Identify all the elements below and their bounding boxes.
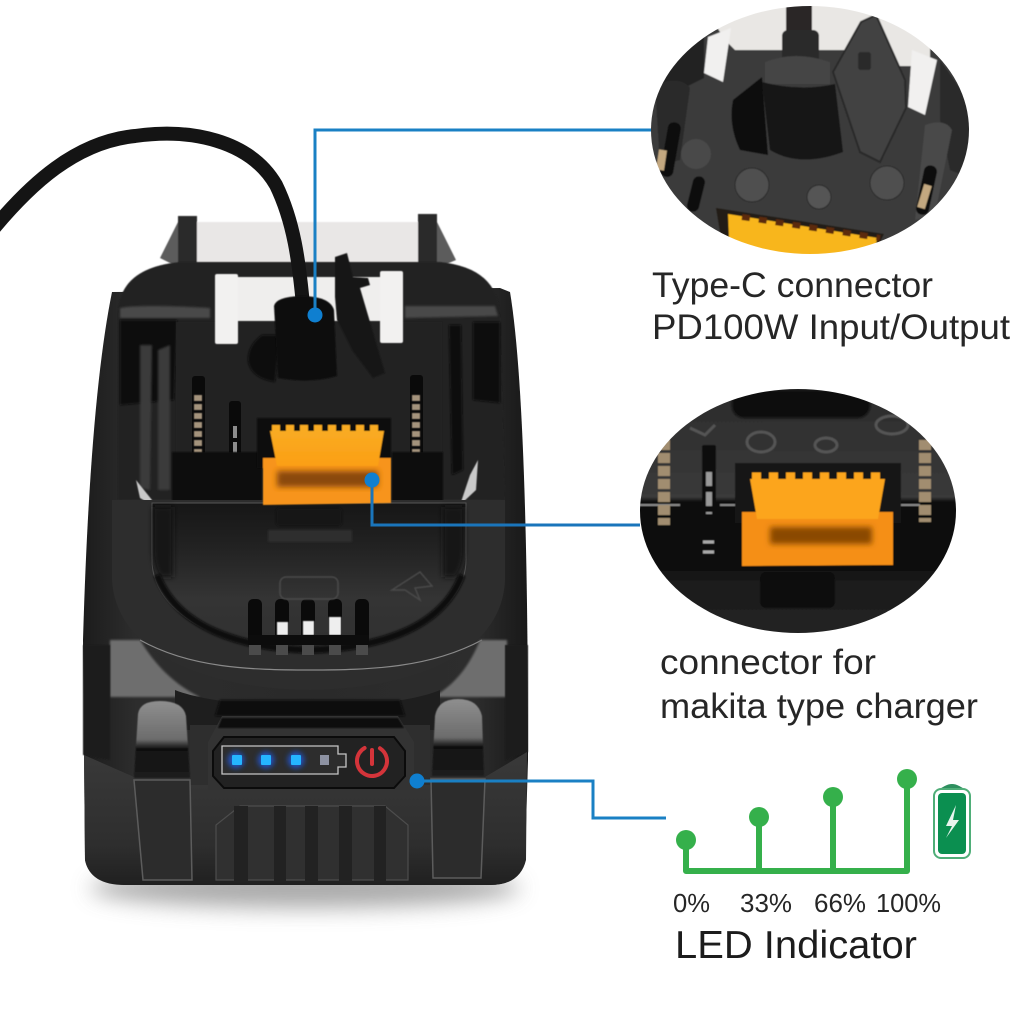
chart labels: percentages: 66% (814, 888, 866, 918)
connector lower tab (263, 458, 391, 505)
lower orange tab (742, 512, 893, 566)
vent slots (248, 599, 369, 655)
power symbol (351, 740, 393, 782)
circle background (640, 389, 956, 633)
clip bump right (432, 699, 484, 776)
orange teeth (752, 472, 885, 480)
yellow connector (716, 208, 884, 243)
white side trim (136, 460, 478, 505)
black contact base (172, 452, 443, 505)
highlight bars on shoulder (120, 306, 498, 318)
lip highlight (140, 640, 482, 670)
label: connector for makita type charger: makita type charger (660, 687, 978, 726)
plate lip (157, 575, 462, 650)
right side slot (449, 325, 463, 475)
lower plate (152, 503, 466, 650)
power cable (0, 134, 303, 305)
callout: Type-C leader line (308, 130, 654, 322)
panel face (213, 737, 405, 788)
lower recess (760, 572, 835, 608)
LED level chart (676, 769, 917, 871)
right slot housing (915, 122, 952, 220)
panel top slot (218, 718, 404, 728)
product: battery adapter photo (0, 134, 528, 908)
label: Type-C connector (652, 266, 1010, 347)
main housing (83, 288, 528, 885)
grip fins (216, 806, 408, 882)
label: LED Indicator: LED Indicator (675, 924, 917, 967)
type-C plug (274, 296, 337, 381)
battery outline (222, 746, 346, 774)
white clip right (380, 271, 403, 343)
dark side recesses (120, 320, 500, 405)
outer ring (112, 500, 505, 690)
plug cap (765, 56, 830, 84)
connector recess (257, 418, 391, 468)
chart labels: percentages: 33% (740, 888, 792, 918)
upper centre band (190, 725, 430, 785)
connector recess (735, 463, 901, 523)
plate notch (732, 77, 768, 155)
top recess (732, 390, 870, 418)
ground shadow (90, 868, 520, 908)
center dark neck (175, 690, 440, 730)
embossed logo marks (280, 572, 432, 600)
orange gap (770, 527, 872, 544)
chart labels: percentages: 0% (673, 888, 710, 918)
chart labels: percentages: 100% (876, 888, 941, 918)
panel base (208, 716, 414, 790)
clip bump left (134, 701, 190, 778)
left slot housing (655, 81, 690, 165)
upper orange block (750, 479, 885, 519)
white rear wall (718, 6, 931, 67)
label: Type-C connector: PD100W Input/Output (652, 308, 1010, 347)
connector notches (742, 217, 880, 238)
embossed buttons (681, 139, 904, 209)
white clip left (215, 274, 238, 344)
grey shoulder right (433, 640, 507, 697)
side ribs (140, 345, 170, 490)
lower block outline right (431, 779, 485, 878)
detail circle: Type-C connector (651, 6, 969, 254)
side divider strip (640, 504, 950, 506)
lower block outline left (134, 780, 192, 880)
label: connector for makita type charger: connector for (660, 643, 876, 682)
icon: green battery (934, 785, 970, 858)
white rear housing (160, 214, 456, 270)
orange connector (257, 418, 391, 505)
plug body (762, 82, 843, 160)
recess under connector (268, 508, 352, 542)
LED panel (208, 716, 414, 790)
white band (235, 277, 385, 321)
contact columns (664, 440, 925, 552)
label: connector for makita type charger (660, 643, 978, 726)
flap in detail (833, 15, 906, 162)
plug neck (781, 30, 820, 58)
type-C port shadow (248, 335, 280, 382)
right clip (908, 50, 937, 115)
label: Type-C connector: Type-C connector (652, 266, 933, 305)
side blocks (83, 645, 528, 760)
connector tab gap (277, 471, 378, 487)
detail circle: makita connector (640, 389, 956, 633)
lower housing (84, 752, 527, 885)
left clip (704, 28, 731, 82)
dark corner left (664, 38, 704, 86)
center plate (176, 322, 442, 460)
callout: LED leader line (410, 774, 666, 818)
embossed marks (690, 416, 908, 452)
plate side shadows (153, 507, 464, 577)
circle background (651, 28, 961, 242)
chart labels: percentages (673, 888, 941, 918)
connector upper block (270, 431, 384, 466)
upper shoulder (118, 262, 505, 500)
grey shoulder left (110, 640, 200, 697)
connector teeth (272, 425, 384, 432)
dark corner right (940, 61, 969, 174)
blue LEDs (228, 752, 329, 768)
contact slots (192, 375, 423, 469)
callout: makita connector leader line (364, 472, 640, 525)
slots and gold contacts (659, 121, 938, 216)
flap (335, 253, 385, 378)
cable in detail (785, 6, 813, 32)
